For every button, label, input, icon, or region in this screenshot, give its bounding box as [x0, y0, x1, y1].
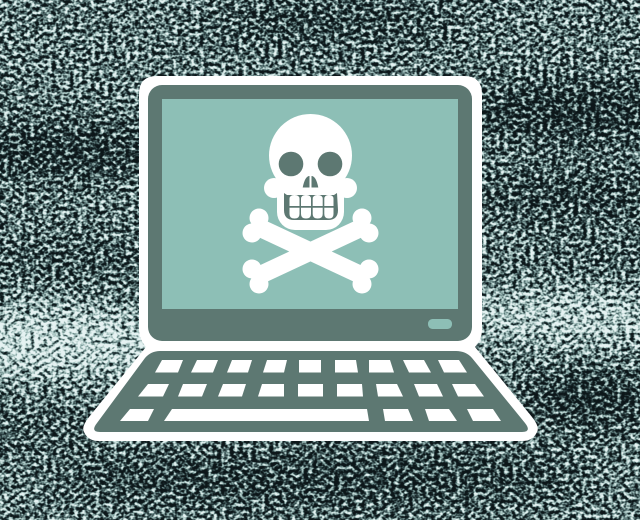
- laptop white outline: [83, 76, 538, 441]
- eye sockets: [279, 152, 303, 176]
- laptop screen: [162, 99, 458, 309]
- laptop screen bezel: [148, 85, 472, 341]
- keyboard keys: [120, 360, 501, 421]
- skull: [264, 114, 357, 230]
- teeth: [284, 193, 338, 220]
- icon: skull and crossbones: [242, 114, 378, 294]
- power indicator: [428, 319, 452, 329]
- keyboard base: [94, 351, 528, 432]
- laptop: [83, 76, 538, 441]
- nose: [303, 176, 318, 188]
- crossbones: [242, 208, 378, 294]
